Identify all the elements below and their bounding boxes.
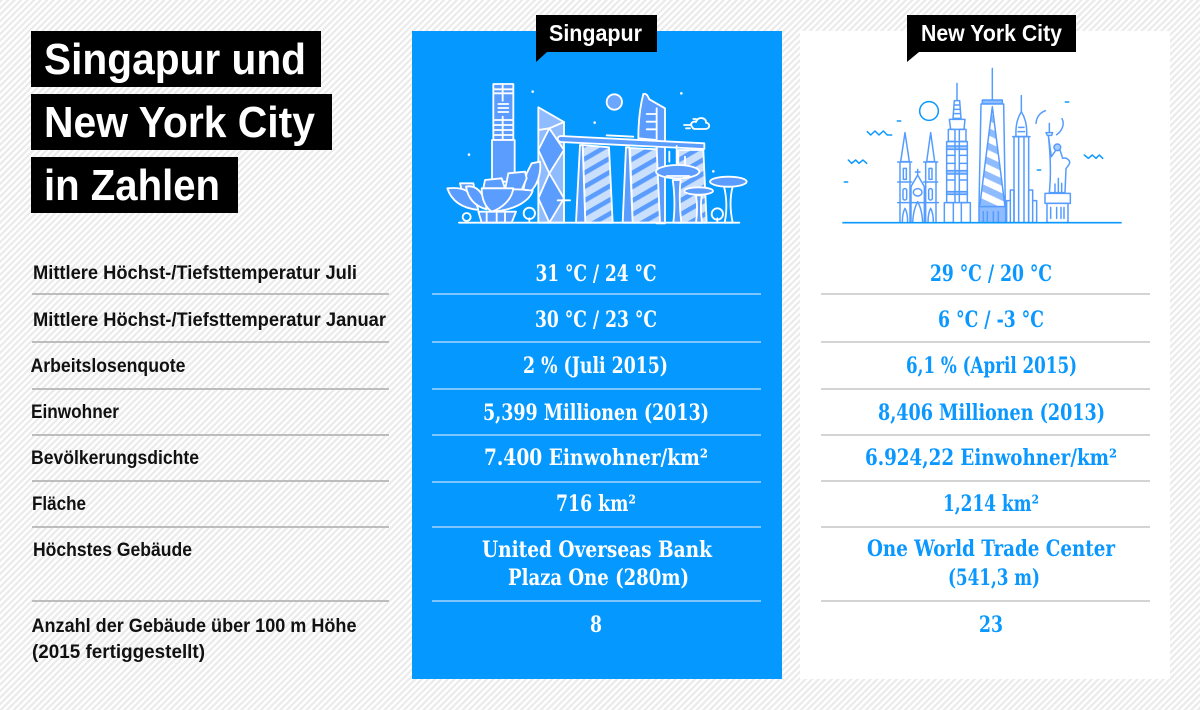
- values: Singapur: 31 °C / 24 °C: [536, 261, 656, 287]
- row labels: (2015 fertiggestellt): [32, 642, 205, 663]
- illustration: New York skyline: [842, 68, 1122, 223]
- row labels: Mittlere Höchst-/Tiefsttemperatur Juli: [33, 263, 357, 284]
- values: Singapur: 7.400 Einwohner/km²: [484, 445, 708, 471]
- values: New York City: 8,406 Millionen (2013): [878, 400, 1105, 426]
- row labels: Einwohner: [31, 402, 120, 423]
- values: New York City: 29 °C / 20 °C: [930, 261, 1052, 287]
- row labels: Anzahl der Gebäude über 100 m Höhe: [32, 616, 356, 637]
- row labels: Höchstes Gebäude: [33, 540, 192, 561]
- tab: New York City: New York City: [921, 20, 1062, 46]
- values: New York City: 23: [979, 612, 1003, 638]
- panel: Singapur: [412, 15, 782, 679]
- values: Singapur: 5,399 Millionen (2013): [483, 400, 709, 426]
- values: Singapur: 8: [590, 612, 602, 638]
- values: Singapur: United Overseas Bank: [482, 537, 713, 563]
- values: Singapur: 30 °C / 23 °C: [535, 307, 657, 333]
- values: New York City: 6,1 % (April 2015): [906, 353, 1077, 379]
- tab: Singapur: Singapur: [549, 20, 642, 46]
- values: New York City: 1,214 km²: [943, 491, 1039, 517]
- title: [31, 31, 332, 213]
- title: Singapur und: [44, 35, 306, 84]
- values: New York City: (541,3 m): [948, 565, 1040, 591]
- values: Singapur: 716 km²: [556, 491, 636, 517]
- values: Singapur: Plaza One (280m): [508, 565, 689, 591]
- title: in Zahlen: [44, 161, 220, 210]
- row labels: Fläche: [32, 494, 86, 515]
- tab: Singapur: [536, 15, 657, 62]
- values: Singapur: [432, 261, 761, 638]
- values: New York City: 6 °C / -3 °C: [938, 307, 1044, 333]
- values: New York City: 6.924,22 Einwohner/km²: [865, 445, 1117, 471]
- tab: New York City: [907, 15, 1076, 62]
- title: New York City: [44, 98, 315, 147]
- row labels: [30, 263, 389, 663]
- values: Singapur: 2 % (Juli 2015): [523, 353, 668, 379]
- row labels: Bevölkerungsdichte: [31, 448, 199, 469]
- values: New York City: [821, 261, 1150, 638]
- row labels: Mittlere Höchst-/Tiefsttemperatur Januar: [33, 310, 387, 331]
- values: New York City: One World Trade Center: [867, 536, 1115, 562]
- row labels: Arbeitslosenquote: [30, 356, 186, 377]
- illustration: Singapur skyline: [447, 84, 747, 223]
- panel: New York City: [800, 15, 1170, 679]
